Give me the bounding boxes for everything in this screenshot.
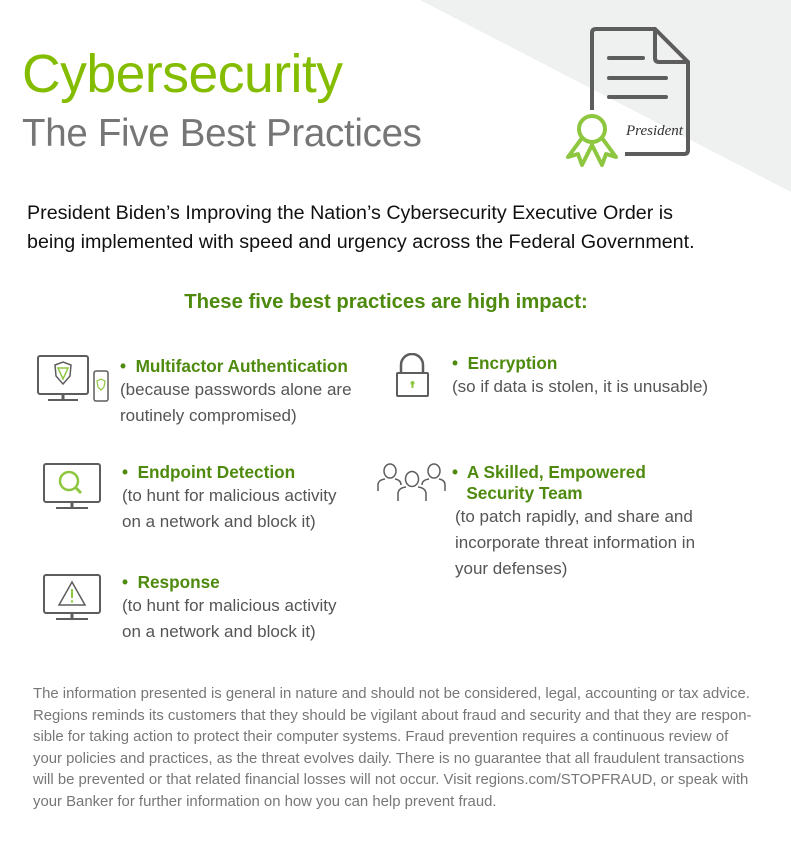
footer disclaimer: sible for taking action to protect their computer systems. Fraud prevention requires a continuous review of [33, 729, 728, 745]
footer disclaimer: your policies and practices, as the threat evolves daily. There is no guarantee that all fraudulent transactions [33, 751, 744, 767]
item: security team: (to patch rapidly, and share and [455, 507, 693, 526]
text [120, 356, 352, 425]
icon: signed document with ribbon: President [625, 123, 684, 139]
footer disclaimer: will be prevented or that related financial losses will not occur. Visit regions.com/STOPFRAUD, or speak with [33, 772, 748, 788]
text [122, 572, 336, 641]
text: routinely compromised) [120, 406, 297, 425]
text: (so if data is stolen, it is unusable) [452, 377, 708, 396]
item: security team [377, 462, 695, 578]
intro paragraph: being implemented with speed and urgency across the Federal Government. [27, 231, 695, 253]
item: encryption [396, 353, 708, 397]
footer disclaimer: your Banker for further information on how you can help prevent fraud. [33, 794, 497, 810]
icon: signed document with ribbon [566, 27, 690, 168]
intro paragraph: President Biden’s Improving the Nation’s Cybersecurity Executive Order is [27, 202, 673, 224]
text: (because passwords alone are [120, 380, 352, 399]
text: (to hunt for malicious activity [122, 486, 336, 505]
item: response [43, 572, 336, 641]
icon: monitor with magnifier [43, 463, 101, 509]
item: multifactor authentication [37, 355, 352, 425]
item: endpoint detection [43, 462, 336, 531]
subtitle: The Five Best Practices [22, 112, 422, 155]
icon: monitor and phone with shield [37, 355, 109, 402]
footer disclaimer: The information presented is general in nature and should not be considered, legal, accounting or tax advice. [33, 686, 750, 702]
text: Security Team [466, 483, 583, 503]
intro paragraph [27, 202, 695, 253]
text: • Encryption [452, 353, 557, 373]
text: on a network and block it) [122, 512, 316, 531]
footer disclaimer: Regions reminds its customers that they should be vigilant about fraud and security and that they are respon- [33, 708, 751, 724]
footer disclaimer [33, 686, 751, 810]
text [452, 353, 708, 396]
text: • A Skilled, Empowered [452, 462, 646, 482]
text [122, 462, 336, 531]
text: • Endpoint Detection [122, 462, 295, 482]
text: • Multifactor Authentication [120, 356, 348, 376]
section heading: These five best practices are high impact: [184, 291, 588, 313]
title: Cybersecurity [22, 45, 343, 104]
text [452, 462, 646, 503]
item: security team: your defenses) [455, 559, 567, 578]
text: (to hunt for malicious activity [122, 596, 336, 615]
icon: three people [377, 463, 446, 501]
text: on a network and block it) [122, 622, 316, 641]
text: • Response [122, 572, 220, 592]
icon: monitor with warning [43, 574, 101, 620]
item: security team: incorporate threat information in [455, 533, 695, 552]
icon: padlock [396, 353, 429, 397]
